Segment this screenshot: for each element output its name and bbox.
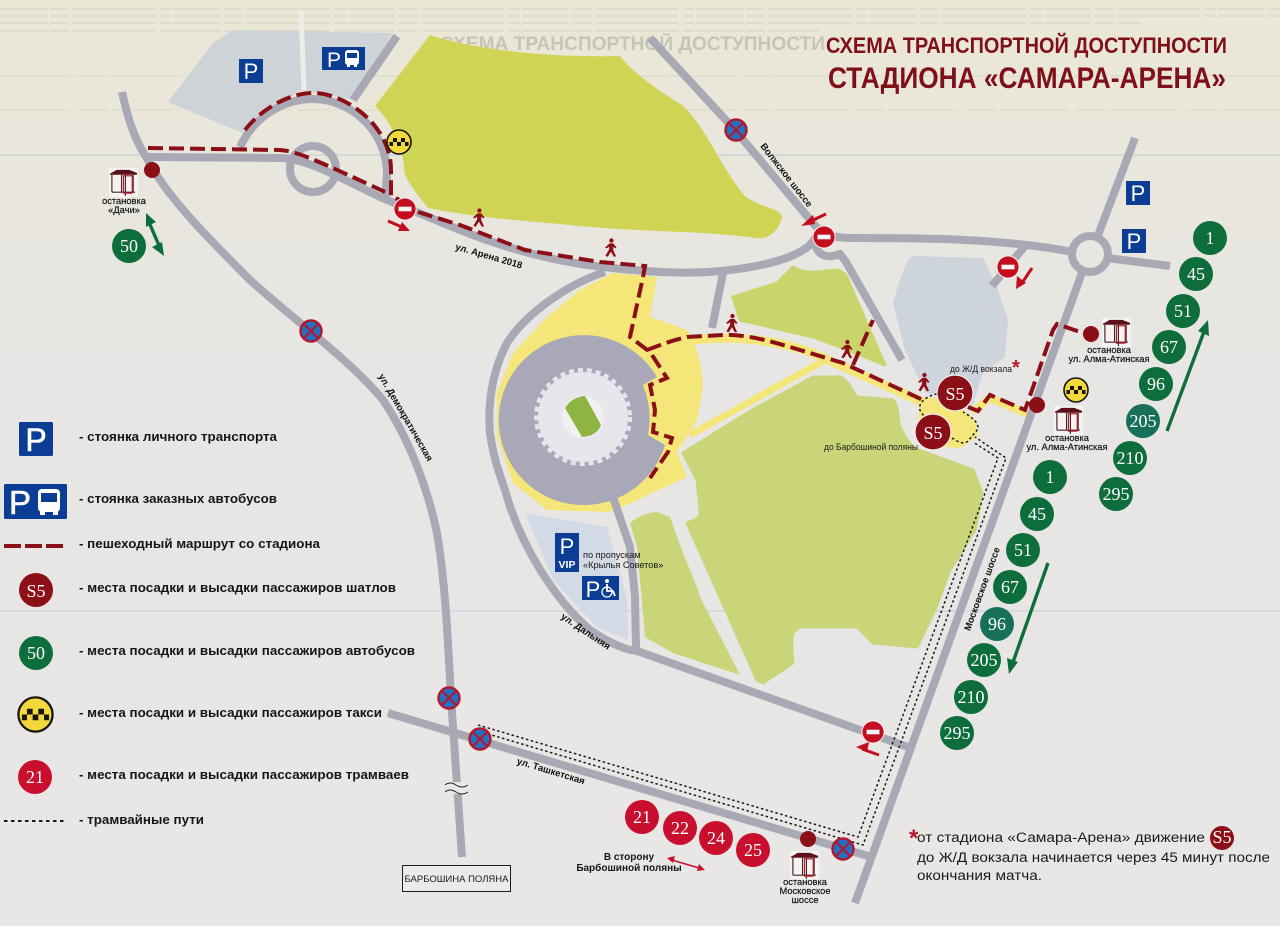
S5 shuttle stops: S5 [945, 384, 965, 404]
footnote [909, 825, 1270, 883]
stop labels: остановка [1045, 433, 1090, 443]
tram routes: В сторону [604, 852, 655, 863]
bus routes: east column [1099, 221, 1227, 511]
stop labels: шоссе [791, 895, 819, 905]
stop labels: остановка [783, 877, 828, 887]
bus routes: east column: 45 [1187, 264, 1205, 284]
VIP parking signs: VIP [559, 559, 575, 571]
bus routes: west column: 67 [1001, 577, 1019, 597]
S5 shuttle stops: S5 [923, 423, 943, 443]
footnote: S5 [1212, 827, 1232, 847]
street labels: ул. Арена 2018 [454, 242, 523, 271]
S5 shuttle stops: до Ж/Д вокзала [950, 364, 1013, 375]
legend: taxi stops: - места посадки и высадки пассажиров такси [79, 705, 382, 720]
icons: pedestrians [473, 208, 930, 391]
stadium surroundings: yellow zone [497, 273, 1028, 512]
VIP parking signs: по пропускам [583, 550, 641, 560]
legend: bus parking: P [9, 484, 31, 521]
footnote: окончания матча. [917, 868, 1042, 883]
legend: bus parking: - стоянка заказных автобусов [79, 491, 277, 506]
bus routes: east column: 67 [1160, 337, 1178, 357]
legend: tram tracks: - трамвайные пути [79, 812, 204, 827]
bus routes: west column: 96 [988, 614, 1006, 634]
stops [109, 162, 1131, 880]
bus routes: east column: 295 [1102, 484, 1130, 504]
bus routes: west column: 1 [1046, 467, 1054, 487]
stop labels: ул. Алма-Атинская [1026, 442, 1108, 452]
bus routes: west column: 51 [1014, 540, 1032, 560]
tram routes: Барбошиной поляны [576, 862, 682, 874]
tram routes: 21 [633, 807, 651, 827]
tram routes: 22 [671, 818, 689, 838]
street labels: Волжское шоссе [758, 141, 814, 210]
parking signs: P [1131, 181, 1145, 206]
parking signs: P [244, 59, 258, 84]
VIP parking signs [555, 533, 663, 602]
title: СХЕМА ТРАНСПОРТНОЙ ДОСТУПНОСТИ [826, 33, 1227, 58]
street labels [376, 141, 1003, 787]
title [826, 33, 1227, 95]
tram tracks [478, 394, 1006, 845]
footnote: до Ж/Д вокзала начинается через 45 минут после [917, 850, 1270, 865]
signs: no stopping [300, 120, 854, 860]
footnote: * [909, 825, 919, 852]
destination box [402, 866, 510, 892]
bus route 50 [112, 213, 164, 263]
legend: car parking: P [25, 422, 47, 458]
legend: shuttle stops [19, 573, 396, 607]
legend: taxi stops [18, 697, 382, 732]
icon: road break [445, 783, 468, 794]
stadium [499, 335, 665, 505]
bus routes: west column: 210 [958, 687, 984, 707]
taxi signs [387, 130, 1088, 402]
legend: shuttle stops: S5 [26, 581, 46, 601]
bus route 50: 50 [120, 236, 138, 256]
roads [122, 36, 1170, 903]
bus routes: east column: 1 [1206, 228, 1214, 248]
bus routes: west column: 295 [944, 723, 970, 743]
bus routes: west column: 45 [1028, 504, 1046, 524]
bus routes: east column: 210 [1116, 448, 1144, 468]
legend: pedestrian route: - пешеходный маршрут со стадиона [79, 536, 321, 551]
bus routes: west column: 205 [970, 650, 998, 670]
destination box: БАРБОШИНА ПОЛЯНА [404, 874, 509, 885]
parking signs: P [327, 49, 341, 72]
bus routes: west column [940, 460, 1067, 750]
VIP parking signs: P [586, 577, 600, 602]
stop labels: ул. Алма-Атинская [1068, 354, 1150, 364]
scanned show-through text [0, 9, 1280, 611]
S5 shuttle stops: до Барбошиной поляны [824, 442, 918, 453]
parking signs: P [1127, 229, 1141, 254]
stop labels [102, 196, 1150, 905]
legend [4, 422, 415, 827]
legend: shuttle stops: - места посадки и высадки пассажиров шатлов [79, 580, 396, 595]
legend: tram stops: 21 [26, 767, 44, 787]
park areas [375, 35, 982, 683]
tram routes: 25 [744, 840, 762, 860]
pedestrian routes [148, 93, 1080, 478]
legend: bus parking [4, 484, 277, 521]
street labels: ул. Дальняя [559, 611, 612, 652]
street labels: Московское шоссе [962, 546, 1003, 632]
stop labels: остановка [1087, 345, 1132, 355]
legend: tram stops: - места посадки и высадки пассажиров трамваев [79, 767, 409, 782]
scanned show-through text: СХЕМА ТРАНСПОРТНОЙ ДОСТУПНОСТИ [440, 33, 825, 55]
S5 shuttle stops [824, 357, 1020, 453]
lot areas: lake and parkings [168, 10, 1008, 640]
tram routes: 24 [707, 828, 725, 848]
legend: bus stops: 50 [27, 643, 45, 663]
legend: bus stops: - места посадки и высадки пассажиров автобусов [79, 643, 415, 658]
street labels: ул. Демократическая [376, 372, 435, 463]
bus routes: east column: 96 [1147, 374, 1165, 394]
bus routes: east column: 51 [1174, 301, 1192, 321]
street labels: ул. Ташкетская [515, 756, 586, 787]
legend: car parking: - стоянка личного транспорта [79, 429, 278, 444]
stop labels: остановка [102, 196, 147, 206]
S5 shuttle stops: * [1012, 357, 1020, 379]
bus routes: east column: 205 [1130, 411, 1156, 431]
tram routes [576, 800, 770, 874]
stop labels: «Дачи» [108, 205, 140, 215]
signs: no entry with arrows [388, 197, 1032, 755]
legend: car parking [19, 422, 278, 458]
title: СТАДИОНА «САМАРА-АРЕНА» [828, 62, 1226, 95]
footnote: от стадиона «Самара-Арена» движение [917, 830, 1205, 845]
VIP parking signs: «Крылья Советов» [583, 560, 663, 570]
parking signs [239, 47, 1150, 254]
legend: tram stops [18, 760, 409, 794]
legend: bus stops [19, 636, 415, 670]
stop labels: Московское [779, 886, 831, 896]
VIP parking signs: P [560, 534, 574, 559]
